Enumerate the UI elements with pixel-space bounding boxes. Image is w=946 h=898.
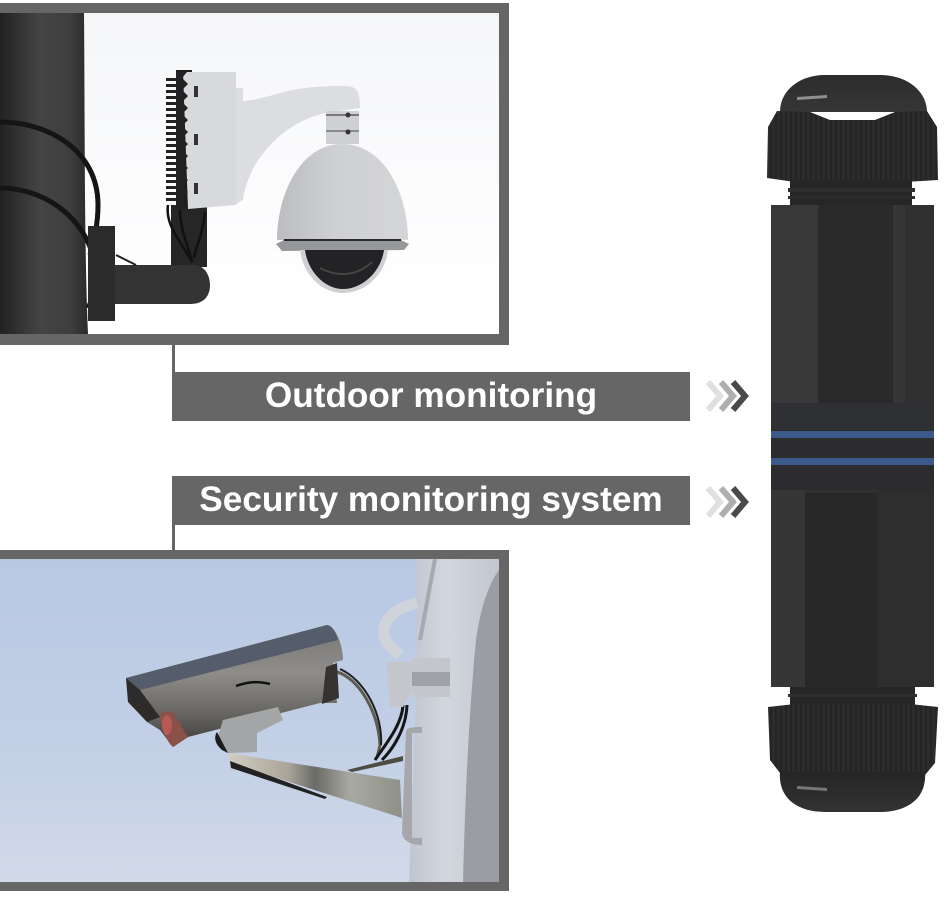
main body lower <box>771 490 934 690</box>
top gland cap <box>780 75 927 112</box>
connector line: top <box>172 344 175 374</box>
label bar: Outdoor monitoring: Outdoor monitoring <box>265 376 597 415</box>
label bar: Outdoor monitoring <box>172 372 690 421</box>
bottom gland cap <box>780 772 925 812</box>
blue ring upper <box>771 431 934 438</box>
icon: concrete wall <box>409 559 499 882</box>
icon: wall bracket and cables <box>337 603 450 845</box>
top thread <box>788 180 915 205</box>
main body upper <box>771 205 934 431</box>
label bar: Security monitoring system: Security monitoring system <box>199 480 663 519</box>
bottom thread <box>788 687 917 707</box>
icon: bullet camera <box>126 625 343 753</box>
panel: outdoor monitoring photo <box>0 3 509 345</box>
blue ring lower <box>771 458 934 465</box>
icon: chevron arrows top <box>708 382 745 410</box>
icon: chevron arrows bottom <box>708 488 745 516</box>
bottom gland nut <box>768 704 938 775</box>
cap highlight bottom <box>797 786 827 791</box>
icon: dome camera <box>172 70 409 293</box>
icon: mounting arm <box>88 205 210 321</box>
cap highlight top <box>797 95 827 100</box>
icon: utility pole <box>0 13 98 334</box>
centre seal <box>771 430 934 490</box>
top gland nut <box>767 111 938 182</box>
icon: black waterproof connector <box>767 75 938 812</box>
connector line: bottom <box>172 525 175 552</box>
icon: support arm <box>228 753 402 818</box>
panel: security monitoring photo <box>0 550 509 891</box>
